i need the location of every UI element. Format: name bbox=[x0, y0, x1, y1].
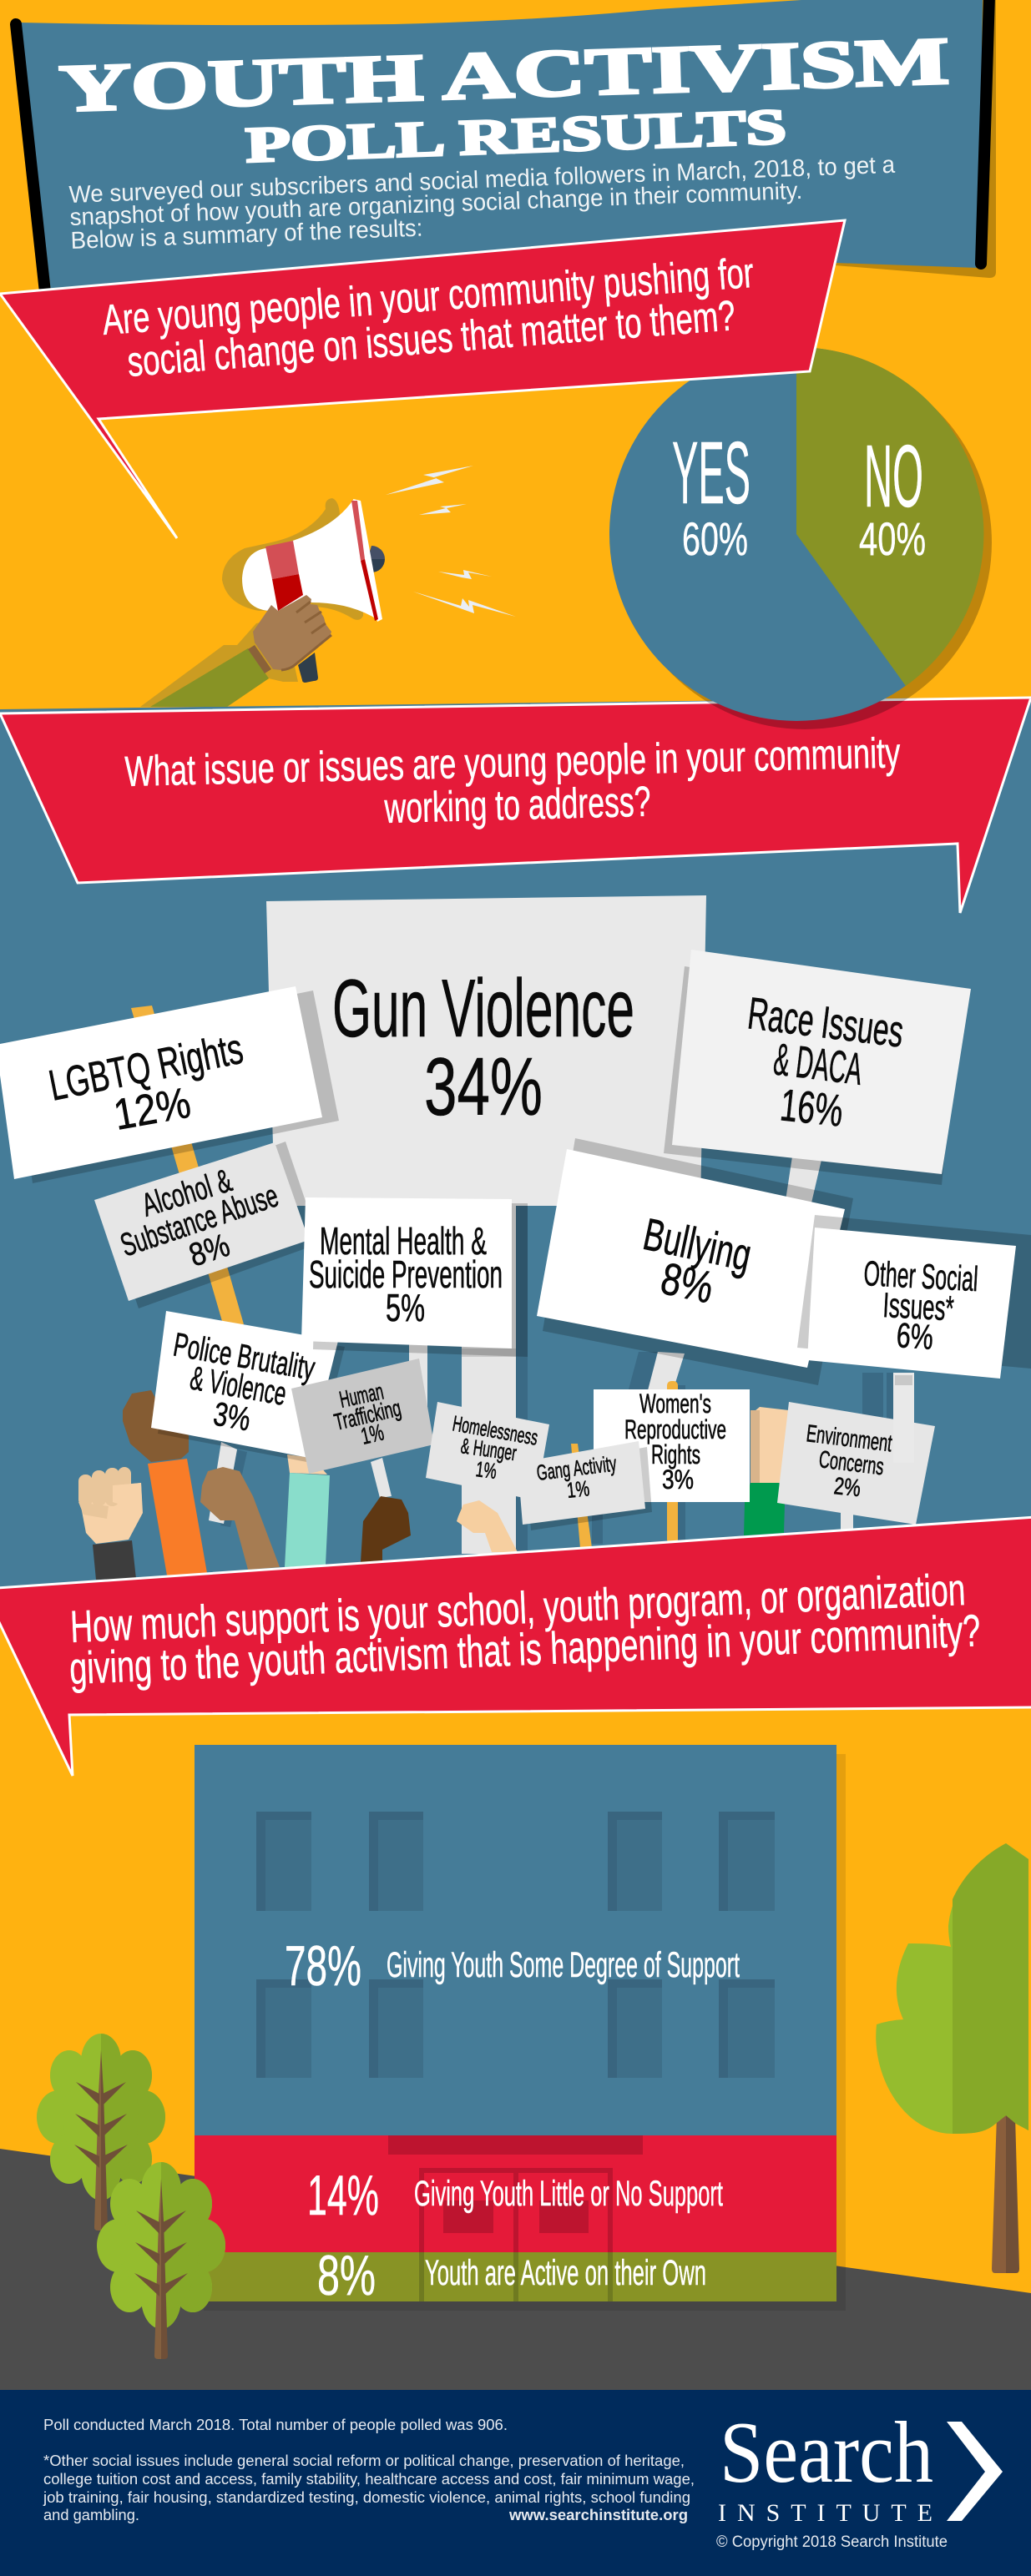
intro text bbox=[68, 152, 896, 255]
title: YOUTH ACTIVISM bbox=[58, 25, 950, 126]
building chart bbox=[195, 1745, 846, 2311]
yes label bbox=[672, 424, 751, 565]
search institute logo: INSTITUTE bbox=[718, 2499, 932, 2527]
hand: brown with orange sleeve bbox=[123, 1390, 207, 1575]
background: blue section bbox=[0, 697, 1031, 1594]
intro text: snapshot of how youth are organizing social change in their community. bbox=[69, 178, 803, 231]
sign: bullying bbox=[537, 1138, 853, 1385]
building segment: 8 percent: 8% bbox=[317, 2244, 376, 2307]
sign: alcohol and substance abuse: Alcohol & bbox=[138, 1162, 236, 1224]
sign: environment concerns: 2% bbox=[832, 1473, 862, 1502]
road bbox=[0, 2149, 1031, 2395]
sign: gang activity bbox=[518, 1441, 652, 1530]
sign: environment concerns: Environment bbox=[805, 1420, 893, 1458]
intro text: Below is a summary of the results: bbox=[70, 215, 423, 255]
tree: left back bbox=[37, 2034, 165, 2231]
pie chart: yes 60 no 40: NO bbox=[864, 427, 923, 526]
sign: gang activity: Gang Activity bbox=[535, 1450, 618, 1485]
building segment: 8 percent bbox=[195, 2244, 836, 2307]
sign: lgbtq rights bbox=[0, 986, 339, 1183]
sign: gun violence: 34% bbox=[424, 1041, 543, 1132]
sign: police brutality: 3% bbox=[210, 1396, 253, 1439]
building segment: 78 percent: Giving Youth Some Degree of Support bbox=[387, 1945, 740, 1985]
sign: womens reproductive rights: Women's bbox=[639, 1389, 711, 1419]
sign: womens reproductive rights: Rights bbox=[651, 1439, 700, 1469]
footer notes: Poll conducted March 2018. Total number of people polled was 906. bbox=[43, 2417, 508, 2433]
sign: alcohol and substance abuse: Substance Abuse bbox=[116, 1178, 283, 1264]
megaphone illustration bbox=[140, 466, 516, 707]
title: POLL RESULTS bbox=[245, 98, 787, 173]
sign: homelessness and hunger: 1% bbox=[474, 1456, 498, 1484]
sign: human trafficking: 1% bbox=[358, 1419, 387, 1449]
sign: environment concerns bbox=[777, 1373, 935, 1525]
sign: other social issues: Issues* bbox=[882, 1285, 955, 1328]
sign: homelessness and hunger: Homelessness bbox=[451, 1410, 540, 1450]
sign: lgbtq rights: LGBTQ Rights bbox=[45, 1025, 247, 1111]
pie chart: yes 60 no 40: YES bbox=[672, 424, 751, 522]
hand: light with white sleeve bbox=[457, 1500, 518, 1552]
no label bbox=[859, 427, 926, 565]
sign: other social issues: 6% bbox=[895, 1315, 935, 1357]
footer notes: college tuition cost and access, family stability, healthcare access and cost, fair minimum wage, bbox=[43, 2471, 695, 2488]
sign: gun violence: Gun Violence bbox=[332, 962, 634, 1054]
building segment: 14 percent: Giving Youth Little or No Support bbox=[414, 2174, 723, 2214]
sign: womens reproductive rights bbox=[594, 1389, 750, 1502]
search institute logo bbox=[718, 2403, 1003, 2527]
sign: mental health: Suicide Prevention bbox=[309, 1253, 503, 1296]
raised hands behind signs bbox=[123, 1317, 345, 1575]
title bbox=[58, 25, 950, 173]
copyright: © Copyright 2018 Search Institute bbox=[716, 2533, 948, 2551]
sign sticks bbox=[131, 1006, 893, 1554]
footer notes bbox=[43, 2417, 695, 2523]
sign: mental health: 5% bbox=[386, 1286, 425, 1329]
sign: other social issues bbox=[797, 1215, 1031, 1379]
sign: bullying: 8% bbox=[657, 1253, 718, 1313]
building segment: 14 percent bbox=[195, 2135, 836, 2252]
tree: left front bbox=[97, 2162, 225, 2359]
sign: race issues: & DACA bbox=[771, 1034, 865, 1095]
sign: human trafficking: Human bbox=[337, 1379, 386, 1413]
sign: human trafficking bbox=[291, 1359, 434, 1474]
sign: mental health bbox=[301, 1197, 528, 1357]
sign: lgbtq rights: 12% bbox=[110, 1079, 195, 1140]
no label: 40% bbox=[859, 512, 926, 565]
sign: gun violence bbox=[266, 895, 706, 1206]
intro text: We surveyed our subscribers and social media followers in March, 2018, to get a bbox=[68, 152, 896, 209]
hand: light with green sleeve bbox=[744, 1407, 789, 1535]
sign: police brutality: Police Brutality bbox=[170, 1327, 317, 1388]
building segment: 8 percent: Youth are Active on their Own bbox=[425, 2253, 706, 2293]
question 1 text: social change on issues that matter to them? bbox=[125, 291, 737, 386]
header banner bbox=[16, 0, 996, 292]
tree: right bbox=[876, 1843, 1028, 2273]
sign: race issues: 16% bbox=[778, 1080, 846, 1137]
sign: homelessness and hunger: & Hunger bbox=[459, 1433, 518, 1465]
footer notes: *Other social issues include general social reform or political change, preservation of heritage, bbox=[43, 2452, 685, 2469]
sign: mental health: Mental Health & bbox=[320, 1219, 487, 1263]
hand: tan bbox=[200, 1467, 280, 1570]
sign: homelessness and hunger bbox=[426, 1402, 549, 1500]
sign: police brutality bbox=[151, 1311, 338, 1458]
sign: police brutality: & Violence bbox=[187, 1360, 289, 1413]
sign: race issues bbox=[664, 950, 971, 1185]
banner: question 1 bbox=[0, 220, 845, 538]
footer notes: job training, fair housing, standardized testing, domestic violence, animal rights, school funding bbox=[43, 2489, 690, 2506]
footer notes: www.searchinstitute.org bbox=[508, 2507, 688, 2523]
question 1 text: Are young people in your community pushing for bbox=[101, 249, 756, 344]
sign: alcohol and substance abuse bbox=[94, 1142, 320, 1308]
sign: womens reproductive rights: 3% bbox=[662, 1464, 694, 1495]
building segment: 78 percent bbox=[195, 1745, 836, 2135]
sign: human trafficking: Trafficking bbox=[331, 1394, 403, 1435]
banner: question 3 bbox=[0, 1517, 1031, 1776]
sound sparks bbox=[386, 466, 516, 617]
raised hands in front bbox=[78, 1407, 789, 1580]
footer bbox=[0, 2390, 1031, 2576]
yes label: 60% bbox=[682, 512, 748, 565]
sign: race issues: Race Issues bbox=[745, 988, 906, 1057]
hand: light fist with black cuff bbox=[78, 1467, 143, 1580]
hand: pale behind aqua sleeve bbox=[287, 1454, 327, 1475]
sign: alcohol and substance abuse: 8% bbox=[184, 1228, 234, 1274]
banner: question 2 bbox=[0, 698, 1031, 913]
question 1 text bbox=[101, 249, 756, 386]
sign: womens reproductive rights: Reproductive bbox=[624, 1414, 726, 1444]
sign: environment concerns: Concerns bbox=[817, 1446, 885, 1480]
pie chart: yes 60 no 40 bbox=[609, 347, 992, 729]
hand: aqua sleeve bbox=[285, 1473, 330, 1567]
sign shadow: police bbox=[158, 1317, 345, 1464]
question 2 text bbox=[124, 728, 901, 832]
building segment: 78 percent: 78% bbox=[285, 1934, 361, 1998]
sign: bullying: Bullying bbox=[639, 1209, 756, 1281]
question 2 text: working to address? bbox=[383, 778, 651, 832]
search institute logo: Search bbox=[720, 2403, 933, 2501]
footer notes: and gambling. bbox=[43, 2507, 139, 2523]
hand: dark brown bbox=[361, 1496, 411, 1562]
sign: gang activity: 1% bbox=[565, 1475, 590, 1503]
building segment: 14 percent: 14% bbox=[307, 2164, 379, 2227]
